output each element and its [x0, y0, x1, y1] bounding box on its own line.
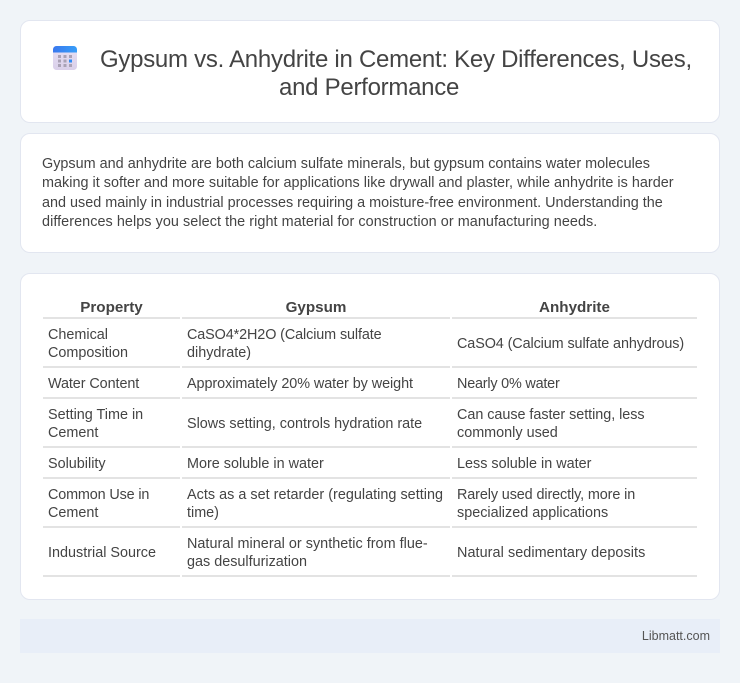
table rows: Acts as a set retarder (regulating setting	[187, 487, 443, 503]
table rows: Less soluble in water	[457, 456, 591, 472]
table header: Property	[80, 299, 143, 316]
table rows: specialized applications	[457, 505, 608, 521]
intro paragraph: Gypsum and anhydrite are both calcium sulfate minerals, but gypsum contains water molecules	[42, 156, 650, 172]
table rows: Water Content	[48, 376, 139, 392]
table rows: CaSO4 (Calcium sulfate anhydrous)	[457, 336, 684, 352]
table rows: gas desulfurization	[187, 554, 307, 570]
table rows: Natural sedimentary deposits	[457, 545, 645, 561]
intro paragraph: differences helps you select the right material for construction or manufacturing needs.	[42, 214, 597, 230]
intro paragraph: and used mainly in industrial processes requiring a moisture-free environment. Understanding the	[42, 195, 663, 211]
table rows: Nearly 0% water	[457, 376, 560, 392]
title: and Performance	[279, 74, 459, 101]
table rows: Composition	[48, 345, 128, 361]
intro paragraph: making it softer and more suitable for applications like drywall and plaster, while anhydrite is harder	[42, 175, 674, 191]
table rows: Setting Time in	[48, 407, 143, 423]
table rows: Rarely used directly, more in	[457, 487, 635, 503]
table rows: time)	[187, 505, 219, 521]
table rows: Solubility	[48, 456, 106, 472]
table rows: Slows setting, controls hydration rate	[187, 416, 422, 432]
table rows: Industrial Source	[48, 545, 156, 561]
header card	[20, 20, 720, 123]
table rows: Approximately 20% water by weight	[187, 376, 413, 392]
table header: Gypsum	[286, 299, 346, 316]
table rows: Natural mineral or synthetic from flue-	[187, 536, 428, 552]
table rows: dihydrate)	[187, 345, 251, 361]
table rows: Common Use in	[48, 487, 149, 503]
table header	[43, 299, 697, 319]
table rows: Cement	[48, 505, 98, 521]
table card	[20, 273, 720, 600]
intro paragraph	[42, 156, 674, 230]
footer credit: Libmatt.com	[642, 629, 710, 643]
title: Gypsum vs. Anhydrite in Cement: Key Differences, Uses,	[100, 46, 692, 73]
table rows: commonly used	[457, 425, 558, 441]
icon: calendar	[53, 46, 77, 70]
footer	[20, 619, 720, 653]
table header: Anhydrite	[539, 299, 610, 316]
title	[100, 46, 692, 101]
table rows: Cement	[48, 425, 98, 441]
table rows: More soluble in water	[187, 456, 324, 472]
comparison table	[43, 299, 697, 577]
intro card	[20, 133, 720, 253]
table rows: CaSO4*2H2O (Calcium sulfate	[187, 327, 382, 343]
table rows: Can cause faster setting, less	[457, 407, 645, 423]
table rows: Chemical	[48, 327, 108, 343]
